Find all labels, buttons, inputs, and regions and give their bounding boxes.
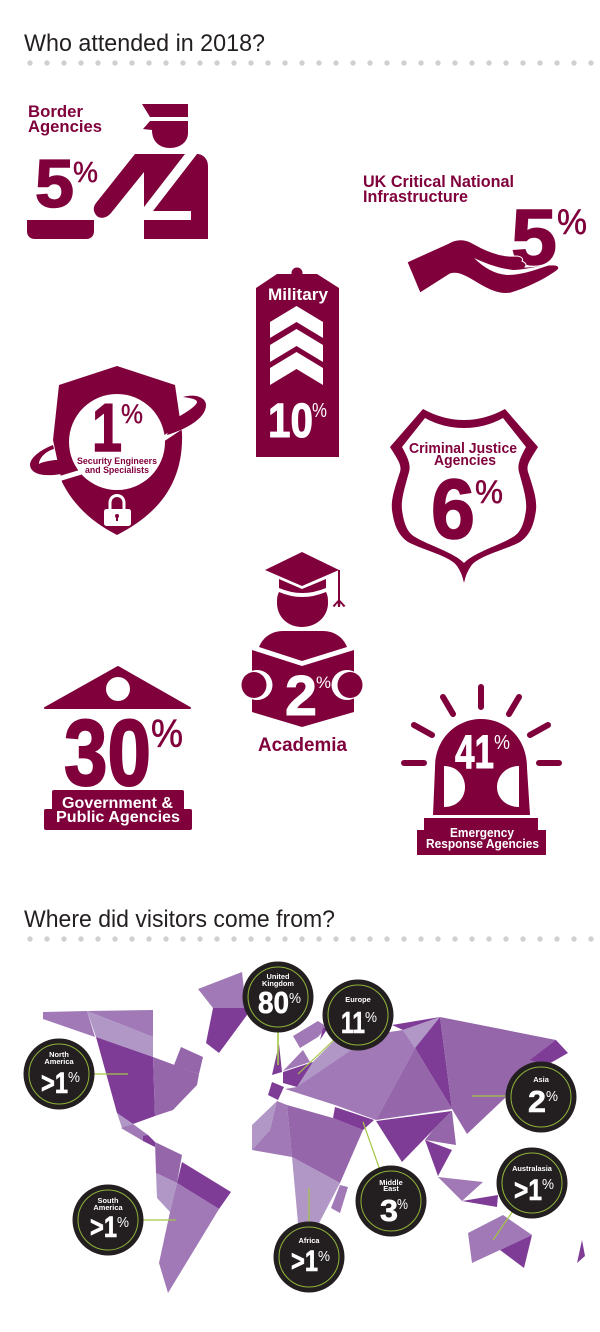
callout: south america: % <box>117 1214 129 1231</box>
label: government and public agencies: Government & <box>62 795 173 812</box>
icon: graduate reading <box>242 552 362 727</box>
callout: south america <box>72 1184 176 1256</box>
callout: middle east: 3 <box>380 1193 398 1228</box>
icon: siren rays <box>404 687 559 763</box>
callout: asia: Asia <box>533 1075 550 1084</box>
label: criminal justice agencies: Agencies <box>434 452 496 469</box>
label: emergency response agencies <box>426 826 539 851</box>
callout: south america: >1 <box>90 1211 117 1244</box>
panel: security engineers <box>30 366 206 535</box>
map: europe and uk <box>268 1021 328 1100</box>
callout: middle east: % <box>397 1196 408 1213</box>
icon: orbit shield <box>30 366 206 535</box>
label: border agencies <box>28 103 102 136</box>
panel: criminal justice agencies <box>390 409 538 583</box>
callout: united kingdom: United <box>266 972 290 981</box>
panel: border agencies <box>27 103 208 239</box>
map: greenland <box>198 972 247 1053</box>
label: academia: Academia <box>258 735 347 756</box>
heading: who attended: Who attended in 2018? <box>24 30 265 57</box>
map: africa <box>252 1101 363 1245</box>
world map <box>43 972 585 1293</box>
value: 1 percent: 1 <box>92 390 122 466</box>
value: 30 percent: % <box>151 713 183 756</box>
callout: australasia: Australasia <box>512 1164 553 1173</box>
callout: asia <box>472 1062 576 1132</box>
callout: united kingdom: Kingdom <box>262 979 294 988</box>
value: 41 percent: % <box>494 732 510 754</box>
callout: africa <box>274 1188 344 1292</box>
panel: academia <box>242 552 362 756</box>
callout: middle east: East <box>383 1184 399 1193</box>
map: russia and asia <box>285 1017 568 1176</box>
callout: australasia: >1 <box>514 1174 542 1207</box>
callout: africa: >1 <box>291 1245 318 1278</box>
label: uk critical national infrastructure: Infrastructure <box>363 187 468 206</box>
callout: middle east <box>356 1122 426 1236</box>
callout: united kingdom: % <box>289 990 301 1007</box>
callout: africa: Africa <box>299 1236 320 1245</box>
callout: united kingdom: 80 <box>258 985 289 1020</box>
callout: australasia: % <box>542 1176 554 1193</box>
label: uk critical national infrastructure <box>363 172 514 206</box>
value: 41 percent: 41 <box>455 725 494 778</box>
value: 2 percent: 2 <box>285 664 317 728</box>
callout: australasia <box>493 1148 568 1240</box>
callout: north america: >1 <box>41 1067 68 1100</box>
map: south east asia and oceania <box>438 1177 585 1268</box>
label: border agencies: Border <box>28 103 84 121</box>
label: uk critical national infrastructure: UK Critical National <box>363 172 514 191</box>
icon: border officer <box>27 104 208 239</box>
panel: military <box>256 268 339 457</box>
value: 5 percent <box>35 146 98 222</box>
value: 5 percent <box>511 192 587 281</box>
callout: united kingdom <box>242 962 314 1065</box>
callout: europe <box>298 980 394 1074</box>
callout: europe: 11 <box>341 1005 365 1040</box>
label: emergency response agencies: Emergency <box>450 826 514 840</box>
panel: government and public agencies <box>44 667 192 830</box>
value: 5 percent: % <box>73 157 98 189</box>
value: 6 percent: 6 <box>431 462 475 556</box>
siren base <box>417 818 546 855</box>
label ribbon <box>44 790 192 830</box>
label: government and public agencies: Public Agencies <box>56 809 180 826</box>
map: north america <box>43 1010 203 1147</box>
value: 10 percent: % <box>312 400 327 422</box>
callout: asia: 2 <box>528 1084 546 1119</box>
value: 5 percent: 5 <box>511 192 557 281</box>
label: security engineers and specialists <box>77 456 157 476</box>
icon: military tag <box>256 268 339 457</box>
icon: police badge <box>390 409 538 583</box>
icon: padlock <box>104 496 131 526</box>
value: 2 percent <box>285 664 331 728</box>
callout: south america: America <box>93 1203 123 1212</box>
value: 2 percent: % <box>316 673 331 692</box>
panel: uk critical national infrastructure <box>363 172 587 294</box>
icon: siren dome <box>433 719 530 815</box>
heading: where did visitors come from: Where did visitors come from? <box>24 906 335 933</box>
callout: north america <box>24 1038 128 1110</box>
callout: south america: South <box>98 1196 119 1205</box>
callout: asia: % <box>546 1088 558 1105</box>
label: government and public agencies <box>56 795 180 826</box>
callout: north america: America <box>44 1057 74 1066</box>
label: criminal justice agencies: Criminal Justice <box>409 440 517 457</box>
value: 30 percent: 30 <box>64 700 151 805</box>
value: 6 percent: % <box>475 474 503 510</box>
label: emergency response agencies: Response Agencies <box>426 837 539 851</box>
label: border agencies: Agencies <box>28 118 102 136</box>
callout: north america: North <box>49 1050 69 1059</box>
label: criminal justice agencies <box>409 440 517 469</box>
icon: chevrons <box>270 306 323 385</box>
label: military: Military <box>268 285 329 304</box>
map: south america <box>155 1142 231 1293</box>
callout: middle east: Middle <box>379 1178 403 1187</box>
value: 6 percent <box>431 462 503 556</box>
callout: europe: % <box>365 1009 377 1026</box>
value: 5 percent: 5 <box>35 146 74 222</box>
icon: roof pediment <box>45 667 190 708</box>
value: 5 percent: % <box>557 203 587 242</box>
label: security engineers and specialists: and Specialists <box>85 465 149 476</box>
panel: emergency response agencies <box>404 687 559 855</box>
callout: north america: % <box>68 1069 80 1086</box>
value: 1 percent: % <box>121 399 143 429</box>
icon: open hand <box>407 240 559 294</box>
value: 10 percent: 10 <box>268 395 313 448</box>
label: security engineers and specialists: Security Engineers <box>77 456 157 467</box>
callout: europe: Europe <box>345 995 371 1004</box>
callout: africa: % <box>318 1248 330 1265</box>
